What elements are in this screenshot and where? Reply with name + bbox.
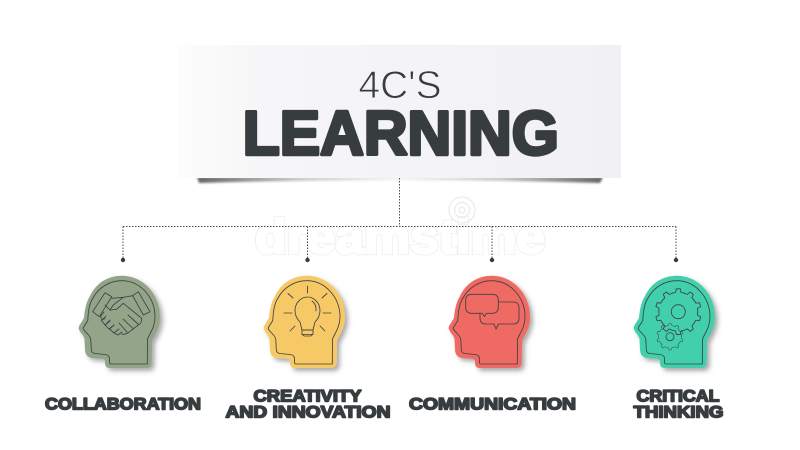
panel card	[178, 45, 621, 178]
icon: speech bubbles	[466, 294, 519, 329]
panel shadow	[197, 177, 603, 183]
title line 1: 4C'S	[358, 64, 442, 107]
label: communication: COMMUNICATION	[409, 396, 576, 414]
head icon: critical thinking	[634, 276, 715, 368]
label: critical thinking: CRITICAL	[636, 388, 720, 406]
label: creativity and innovation	[226, 388, 390, 422]
connector tree	[123, 178, 676, 259]
title panel	[178, 45, 621, 183]
label: critical thinking: THINKING	[634, 404, 724, 422]
label: collaboration: COLLABORATION	[45, 396, 201, 414]
icon: handshake	[93, 292, 150, 335]
icon: gears	[655, 289, 702, 350]
head icon: communication	[449, 276, 530, 368]
label: creativity and innovation: AND INNOVATION	[226, 404, 390, 422]
watermark: dreamstime	[255, 211, 545, 264]
icon: light bulb	[284, 286, 331, 336]
watermark: dreamstime	[255, 211, 545, 264]
connector dots	[121, 258, 678, 262]
title line 2: LEARNING	[243, 99, 559, 168]
label: creativity and innovation: CREATIVITY	[254, 388, 362, 406]
head icon: collaboration	[79, 276, 160, 368]
head icon: creativity	[264, 276, 345, 368]
label: critical thinking	[634, 388, 724, 422]
